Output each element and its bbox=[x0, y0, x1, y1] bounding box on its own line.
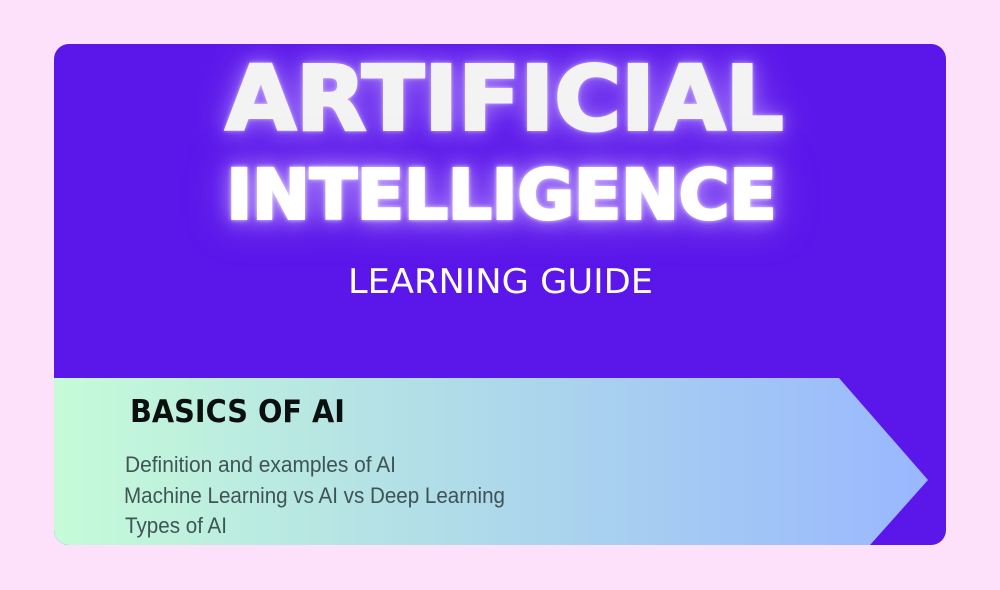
topic: comparison: Machine Learning vs AI vs Deep Learning bbox=[124, 483, 505, 508]
section heading: BASICS OF AI bbox=[130, 394, 345, 430]
topic list bbox=[124, 452, 505, 538]
title: intelligence: INTELLIGENCE bbox=[226, 156, 776, 236]
subtitle: learning guide: LEARNING GUIDE bbox=[348, 262, 653, 302]
arrow banner bbox=[54, 378, 928, 545]
title block with glow bbox=[226, 46, 783, 236]
topic: types: Types of AI bbox=[125, 513, 227, 538]
topic: definition: Definition and examples of AI bbox=[125, 452, 396, 477]
infographic canvas bbox=[54, 44, 946, 545]
section: basics of AI arrow bbox=[54, 378, 928, 545]
panel: purple card bbox=[54, 44, 946, 545]
title: artificial: ARTIFICIAL bbox=[226, 46, 783, 150]
